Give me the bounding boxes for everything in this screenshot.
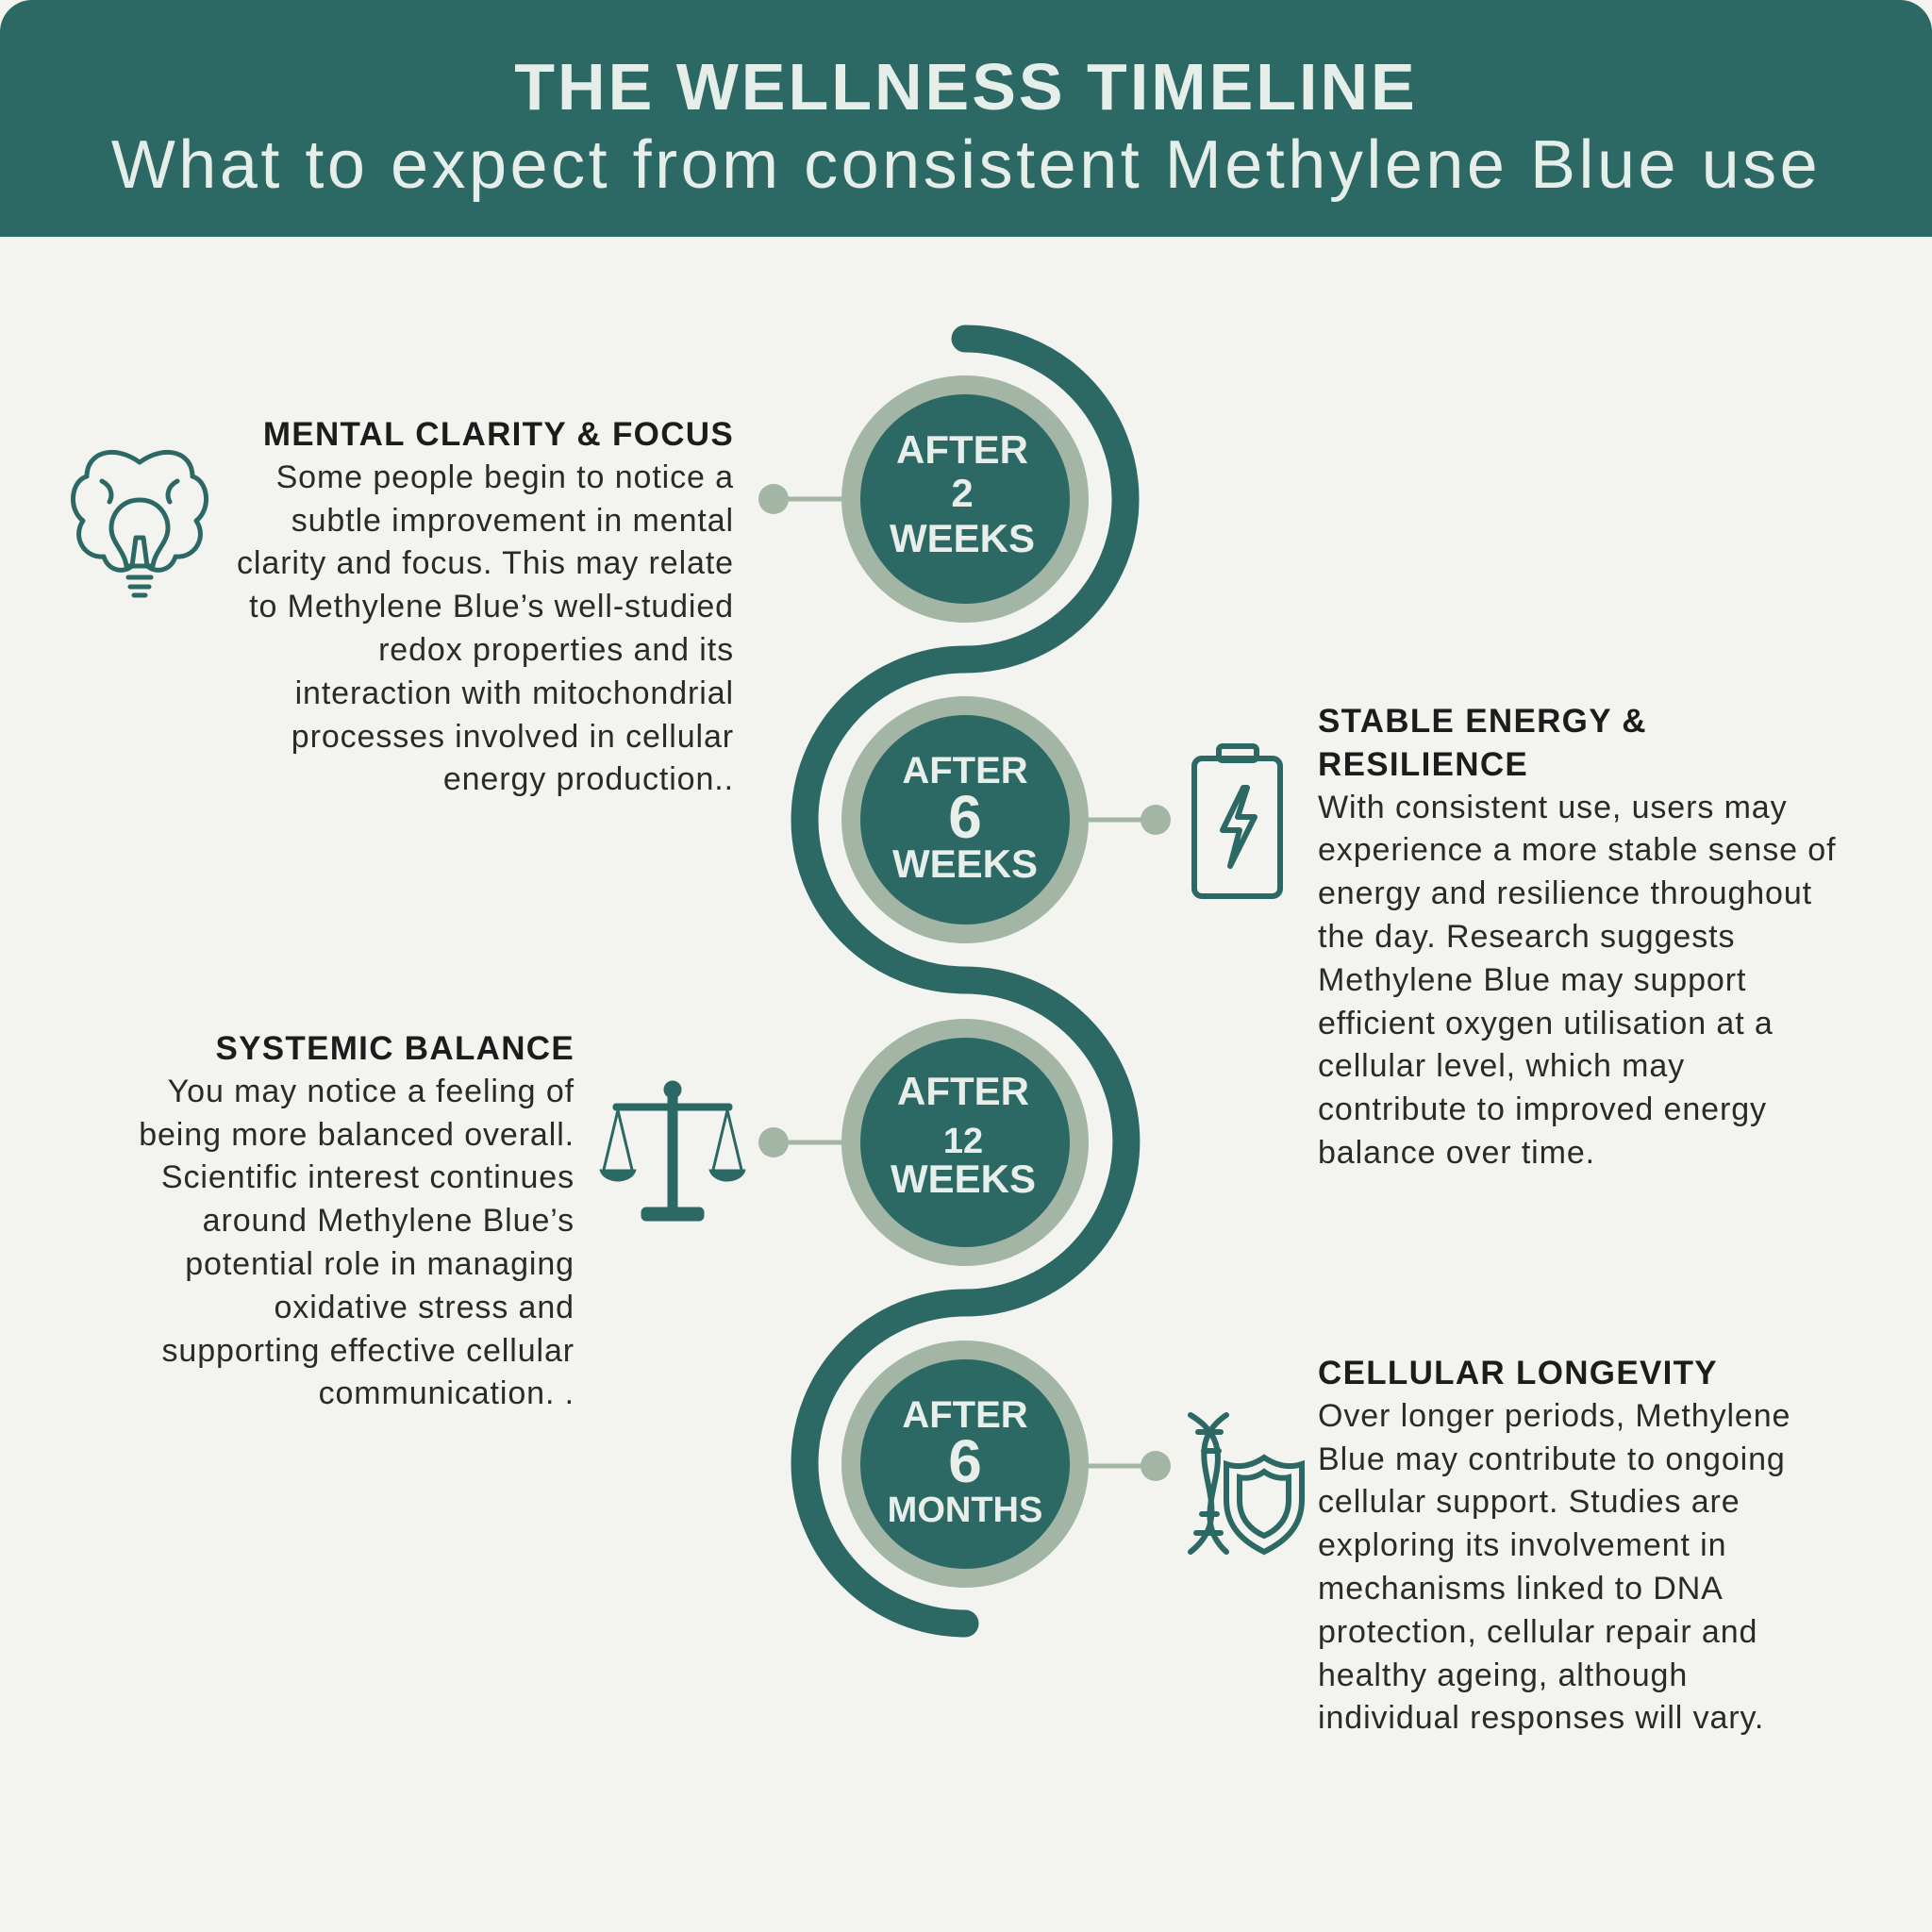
text block: cellular longevity: Blue may contribute to ongoing: [1318, 1441, 1786, 1477]
circle: after 12 weeks: [841, 1019, 1089, 1266]
circle: after 6 months: MONTHS: [888, 1491, 1042, 1530]
circle: after 2 weeks: AFTER: [896, 427, 1028, 472]
text block: stable energy: the day. Research suggests: [1318, 919, 1735, 955]
text block: mental clarity: clarity and focus. This may relate: [237, 545, 734, 581]
text block: mental clarity: Some people begin to notice a: [276, 459, 734, 495]
connector 2: [1075, 805, 1171, 835]
text block: systemic balance: Scientific interest continues: [161, 1159, 575, 1195]
text block: stable energy: balance over time.: [1318, 1135, 1595, 1171]
text block: mental clarity: MENTAL CLARITY & FOCUS: [263, 416, 734, 453]
circle: after 6 weeks: 6: [948, 783, 982, 851]
title: THE WELLNESS TIMELINE: [514, 50, 1418, 124]
text block: cellular longevity: exploring its involvement in: [1318, 1527, 1726, 1563]
circle: after 6 weeks: WEEKS: [892, 841, 1038, 886]
circle: after 12 weeks: WEEKS: [891, 1157, 1036, 1201]
text block: stable energy: energy and resilience throughout: [1318, 875, 1812, 911]
text block: mental clarity: subtle improvement in mental: [291, 503, 734, 539]
text block: cellular longevity: protection, cellular repair and: [1318, 1614, 1757, 1650]
circle: after 6 weeks: [841, 696, 1089, 943]
text block: stable energy: efficient oxygen utilisation at a: [1318, 1006, 1774, 1041]
text block: cellular longevity: healthy ageing, although: [1318, 1657, 1688, 1693]
text block: systemic balance: supporting effective cellular: [162, 1333, 575, 1369]
connector 1: [758, 484, 849, 514]
spiral path: [805, 339, 1126, 1624]
text block: systemic balance: around Methylene Blue’s: [203, 1203, 575, 1239]
text block: cellular longevity: individual responses will vary.: [1318, 1700, 1764, 1736]
text block: stable energy: STABLE ENERGY &: [1318, 703, 1647, 740]
text block: systemic balance: SYSTEMIC BALANCE: [215, 1030, 575, 1067]
text block: stable energy: experience a more stable sense of: [1318, 832, 1836, 868]
text block: systemic balance: You may notice a feeling of: [168, 1074, 575, 1109]
icon: battery: [1194, 746, 1280, 896]
connector 3: [758, 1127, 849, 1158]
text block: cellular longevity: CELLULAR LONGEVITY: [1318, 1355, 1718, 1391]
subtitle: What to expect from consistent Methylene Blue use: [111, 127, 1821, 203]
text block: mental clarity: energy production..: [443, 761, 734, 797]
text block: systemic balance: communication. .: [319, 1375, 575, 1411]
text block: stable energy: Methylene Blue may support: [1318, 962, 1746, 998]
text block: stable energy: [1318, 703, 1836, 1171]
text block: systemic balance: [139, 1030, 575, 1411]
circle: after 2 weeks: WEEKS: [890, 516, 1035, 560]
text block: mental clarity: [237, 416, 734, 797]
circle: after 2 weeks: 2: [951, 471, 974, 515]
text block: systemic balance: being more balanced overall.: [139, 1117, 575, 1153]
icon: scales: [600, 1081, 745, 1221]
text block: cellular longevity: mechanisms linked to DNA: [1318, 1571, 1724, 1607]
text block: stable energy: contribute to improved energy: [1318, 1091, 1767, 1127]
circle: after 6 months: AFTER: [902, 1394, 1028, 1436]
circle: after 6 months: [841, 1341, 1089, 1588]
icon: brain bulb: [73, 452, 207, 595]
circle: after 12 weeks: AFTER: [897, 1069, 1029, 1113]
text block: stable energy: RESILIENCE: [1318, 746, 1528, 783]
circle: after 2 weeks: [841, 375, 1089, 623]
text block: cellular longevity: Over longer periods, Methylene: [1318, 1398, 1790, 1434]
connector 4: [1075, 1451, 1171, 1481]
text block: mental clarity: redox properties and its: [378, 632, 734, 668]
text block: cellular longevity: cellular support. Studies are: [1318, 1484, 1740, 1520]
text block: systemic balance: oxidative stress and: [274, 1290, 575, 1325]
text block: systemic balance: potential role in managing: [185, 1246, 575, 1282]
text block: mental clarity: processes involved in cellular: [291, 719, 734, 755]
text block: mental clarity: interaction with mitochondrial: [295, 675, 734, 711]
header: [0, 0, 1932, 237]
text block: stable energy: cellular level, which may: [1318, 1048, 1685, 1084]
icon: DNA shield: [1191, 1415, 1302, 1552]
circle: after 6 weeks: AFTER: [902, 750, 1028, 791]
circle: after 12 weeks: 12: [943, 1122, 983, 1161]
circle: after 6 months: 6: [948, 1427, 982, 1495]
text block: cellular longevity: [1318, 1355, 1790, 1736]
text block: mental clarity: to Methylene Blue’s well-studied: [249, 589, 734, 625]
text block: stable energy: With consistent use, users may: [1318, 790, 1788, 825]
